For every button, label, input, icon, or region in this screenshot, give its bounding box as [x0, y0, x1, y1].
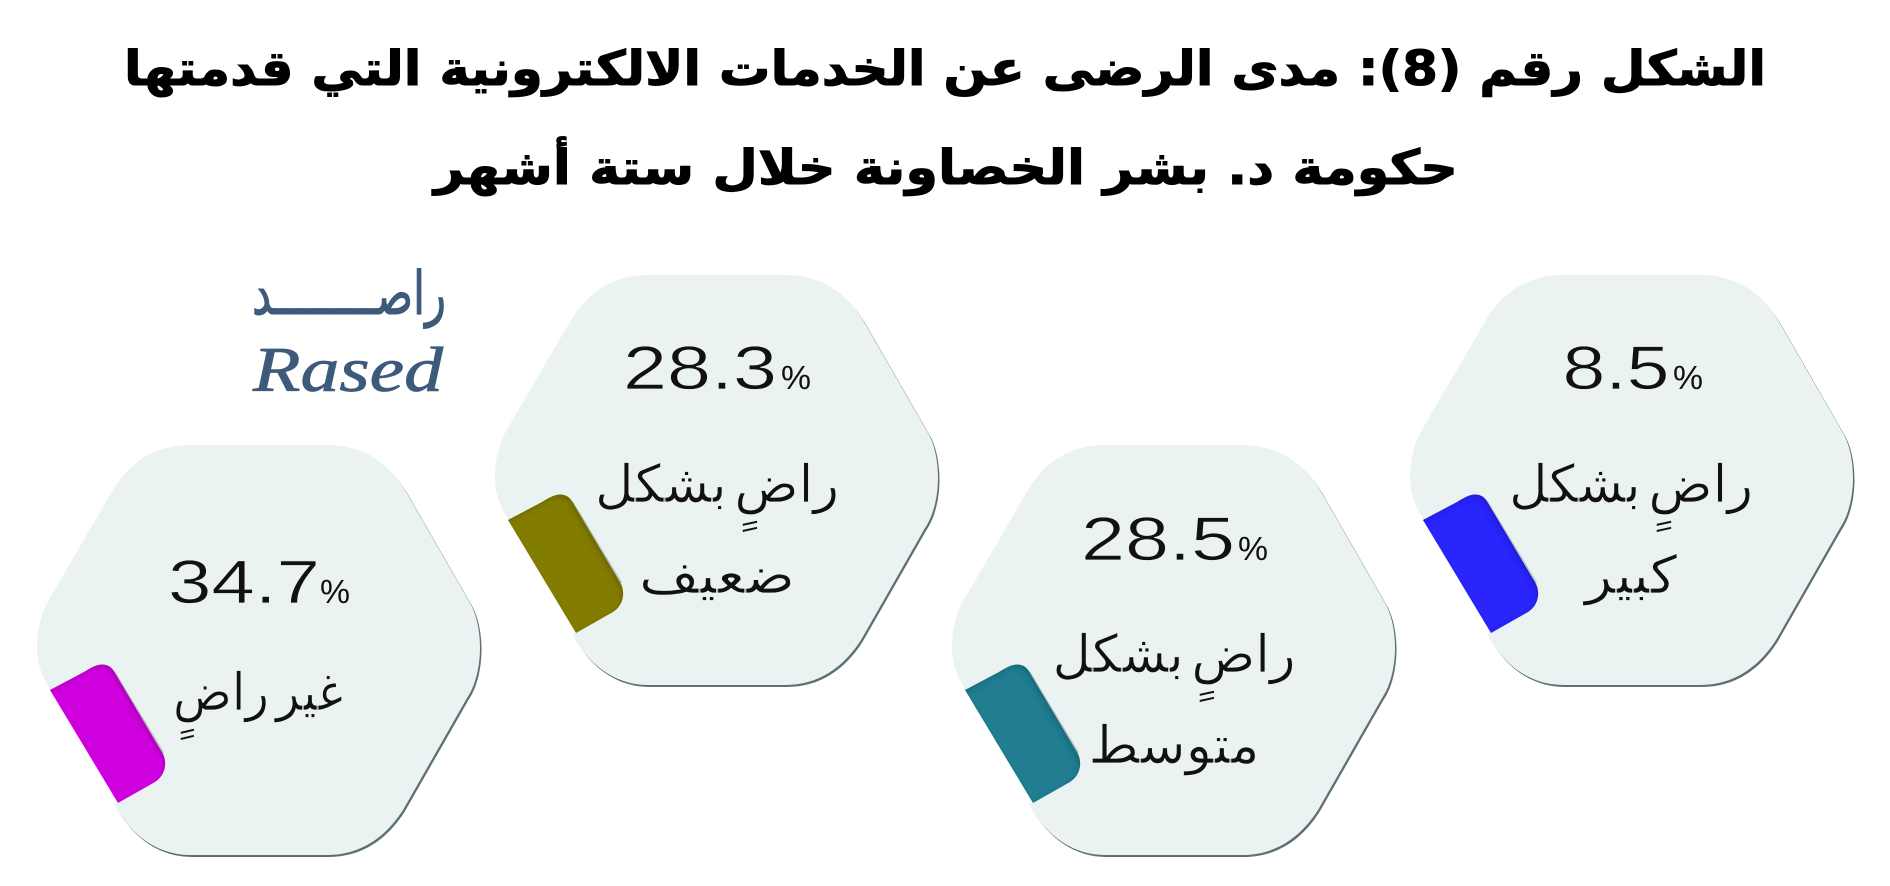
tab: magenta: [50, 664, 165, 803]
value: 8.5%: %: [1673, 359, 1703, 396]
label: راضٍ بشكل: [595, 455, 839, 533]
value: 28.5%: %: [1238, 530, 1268, 567]
logo: Rased: Rased: [252, 334, 444, 405]
value: 8.5%: [1562, 334, 1703, 402]
panel: moderately satisfied 28.5%: [952, 445, 1396, 857]
value: 34.7%: [168, 548, 350, 616]
tab: blue: [1423, 494, 1538, 633]
label: غير راضٍ: [173, 663, 343, 741]
label: [595, 455, 839, 606]
logo: Rased: راصــــــــد: [252, 259, 446, 329]
panel: weakly satisfied 28.3%: [495, 275, 940, 687]
label: راضٍ بشكل: [1052, 625, 1296, 703]
value: 28.5%: [1081, 505, 1268, 573]
label: راضٍ بشكل: [1509, 455, 1753, 533]
title: حكومة د. بشر الخصاونة خلال ستة أشهر: [432, 136, 1458, 196]
label: كبير: [1582, 546, 1677, 606]
logo: Rased: [252, 259, 446, 405]
value: 28.3%: 28.3: [623, 334, 777, 402]
value: 28.5%: 28.5: [1081, 505, 1235, 573]
title: الشكل رقم (8): مدى الرضى عن الخدمات الالكترونية التي قدمتها: [124, 41, 1766, 97]
tab: teal: [965, 664, 1080, 803]
value: 28.3%: %: [781, 359, 811, 396]
label: ضعيف: [639, 546, 795, 606]
value: 34.7%: %: [320, 573, 350, 610]
panel: not satisfied 34.7%: [37, 445, 482, 857]
value: 28.3%: [623, 334, 811, 402]
title: [124, 41, 1766, 196]
value: 34.7%: 34.7: [168, 548, 320, 616]
tab: olive: [508, 494, 623, 633]
panel: highly satisfied 8.5%: [1410, 275, 1854, 687]
value: 8.5%: 8.5: [1562, 334, 1670, 402]
label: [1509, 455, 1753, 606]
label: متوسط: [1088, 716, 1260, 776]
label: [1052, 625, 1296, 776]
